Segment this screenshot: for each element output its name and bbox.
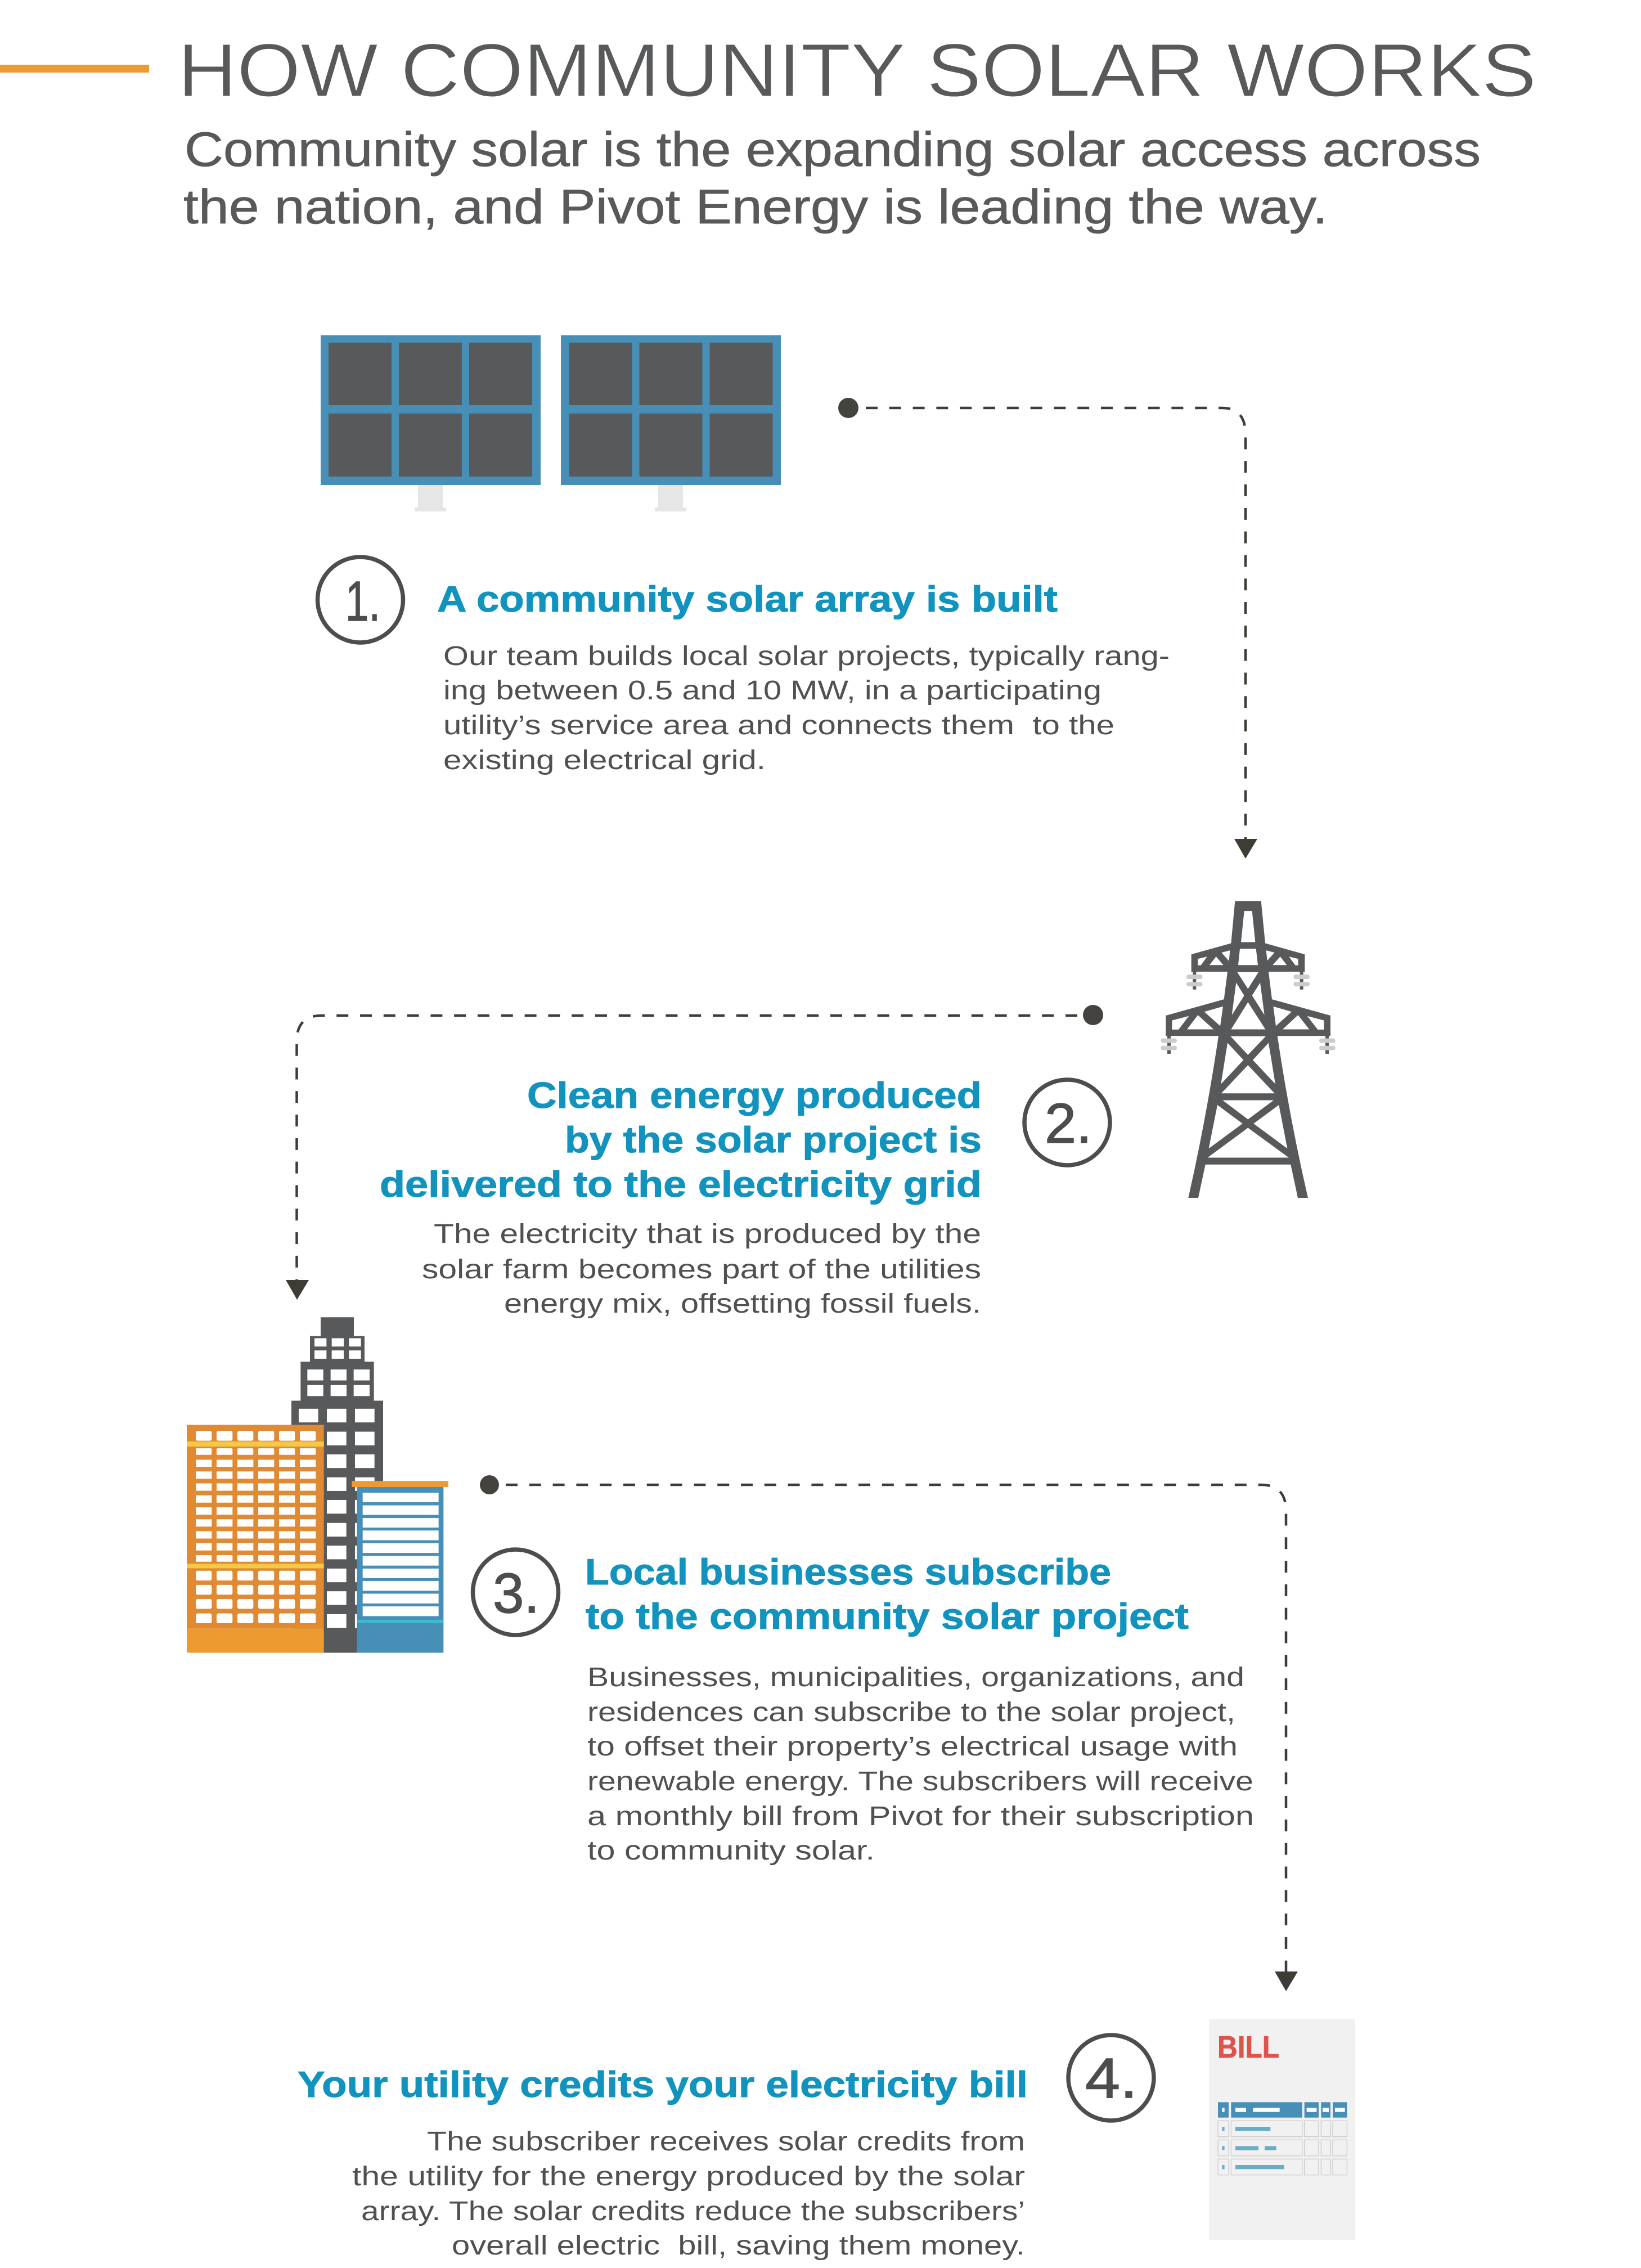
step 3 heading: Local businesses subscribe — [585, 1551, 1111, 1592]
arrow: buildings to bill — [480, 1475, 1298, 1991]
arrow: tower to buildings — [286, 1005, 1103, 1300]
icon: city buildings — [187, 1317, 448, 1652]
icon: transmission tower — [1161, 901, 1336, 1198]
step 2 heading — [380, 1075, 982, 1205]
step 1 body — [443, 641, 1170, 775]
step 1 text — [317, 557, 1170, 775]
step 3 number badge: 3. — [493, 1562, 539, 1625]
accent bar — [0, 65, 149, 73]
step 3 heading — [585, 1551, 1189, 1637]
step 4 number badge — [1068, 2035, 1154, 2121]
step 2 text — [380, 1075, 1110, 1319]
subtitle — [183, 123, 1481, 234]
step 3 body: renewable energy. The subscribers will receive — [587, 1767, 1253, 1797]
icon: bill document — [1209, 2019, 1355, 2240]
step 2 number badge: 2. — [1045, 1092, 1092, 1155]
step 4 body: The subscriber receives solar credits from — [427, 2127, 1025, 2157]
arrow: panels to tower — [838, 398, 1257, 859]
step 2 body: solar farm becomes part of the utilities — [422, 1255, 981, 1285]
blue building — [352, 1481, 448, 1652]
grey tower — [291, 1317, 383, 1652]
step 1 body: utility’s service area and connects them to the — [443, 711, 1114, 740]
icon: solar panels — [321, 335, 781, 511]
step 1 body: ing between 0.5 and 10 MW, in a participating — [443, 676, 1102, 706]
step 3 body: to community solar. — [587, 1836, 875, 1866]
step 3 number badge — [473, 1550, 558, 1635]
step 2 body — [422, 1219, 981, 1319]
step 3 body — [587, 1663, 1254, 1866]
step 1 number badge: 1. — [345, 570, 380, 633]
subtitle: the nation, and Pivot Energy is leading the way. — [183, 180, 1328, 234]
step 4 number badge: 4. — [1085, 2047, 1138, 2110]
step 3 body: Businesses, municipalities, organizations, and — [587, 1663, 1244, 1692]
step 1 number badge — [317, 557, 403, 643]
step 3 body: a monthly bill from Pivot for their subscription — [587, 1802, 1254, 1831]
subtitle: Community solar is the expanding solar access across — [185, 123, 1481, 177]
step 3 body: to offset their property’s electrical usage with — [587, 1732, 1238, 1762]
step 4 body: overall electric bill, saving them money. — [452, 2231, 1025, 2261]
step 4 text — [298, 2035, 1154, 2261]
step 3 text — [473, 1550, 1254, 1866]
bill table — [1218, 2102, 1347, 2175]
step 3 heading: to the community solar project — [586, 1596, 1189, 1637]
step 2 body: energy mix, offsetting fossil fuels. — [504, 1289, 981, 1319]
title: HOW COMMUNITY SOLAR WORKS — [178, 29, 1536, 113]
step 4 body: array. The solar credits reduce the subscribers’ — [361, 2197, 1025, 2226]
step 2 heading: by the solar project is — [565, 1119, 982, 1160]
step 1 body: Our team builds local solar projects, typically rang- — [443, 641, 1170, 671]
step 2 number badge — [1024, 1080, 1110, 1165]
bill label: BILL — [1217, 2029, 1279, 2064]
step 4 body: the utility for the energy produced by the solar — [352, 2162, 1025, 2191]
step 3 body: residences can subscribe to the solar project, — [587, 1697, 1235, 1727]
step 1 heading: A community solar array is built — [437, 578, 1058, 619]
step 2 heading: Clean energy produced — [527, 1075, 982, 1116]
step 2 heading: delivered to the electricity grid — [380, 1164, 982, 1205]
step 4 body — [352, 2127, 1025, 2261]
step 2 body: The electricity that is produced by the — [434, 1219, 981, 1249]
orange building — [187, 1425, 324, 1652]
step 4 heading: Your utility credits your electricity bill — [298, 2064, 1028, 2105]
step 1 body: existing electrical grid. — [443, 745, 766, 775]
